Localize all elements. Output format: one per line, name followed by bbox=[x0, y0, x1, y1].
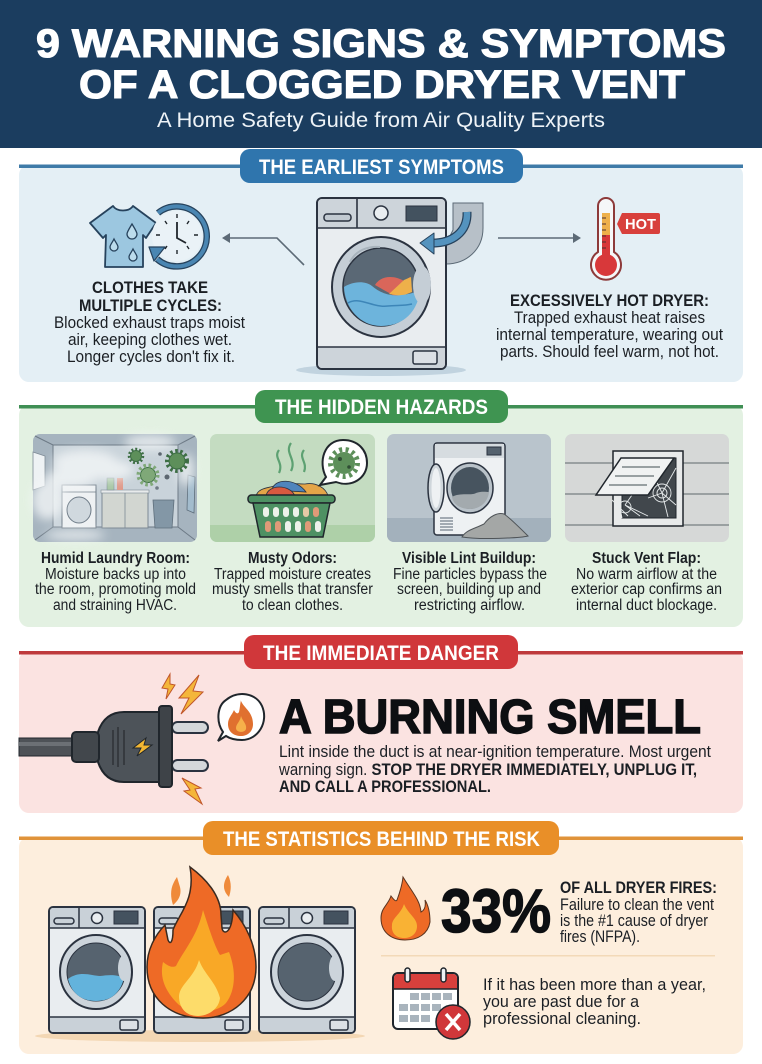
heading: the earliest symptoms bbox=[240, 149, 523, 183]
text: clothes take multiple cycles: Blocked exhaust traps moist bbox=[54, 314, 245, 332]
heading: the statistics behind the risk: THE STATISTICS BEHIND THE RISK bbox=[223, 828, 540, 851]
panel: the earliest symptoms bbox=[19, 149, 743, 382]
text: clothes take multiple cycles: Longer cycles don't fix it. bbox=[67, 348, 235, 366]
text: of all dryer fires: is the #1 cause of dryer bbox=[560, 912, 708, 930]
illustration: humid laundry room bbox=[32, 434, 197, 542]
text: musty odors: Trapped moisture creates bbox=[214, 566, 371, 583]
text: excessively hot dryer: EXCESSIVELY HOT DRYER: bbox=[510, 292, 709, 310]
text: of all dryer fires bbox=[560, 879, 717, 946]
arrow: to thermometer bbox=[498, 233, 581, 243]
text: musty odors bbox=[212, 550, 373, 614]
text: visible lint buildup bbox=[393, 550, 547, 614]
heading: the immediate danger: THE IMMEDIATE DANGER bbox=[263, 642, 499, 665]
illustration: stuck vent flap bbox=[565, 434, 729, 542]
arrow: to clothes bbox=[222, 233, 304, 265]
text: burning smell warning: Lint inside the duct is at near-ignition temperature. Most urgent bbox=[279, 743, 711, 761]
text: clothes take multiple cycles: air, keeping clothes wet. bbox=[68, 331, 232, 349]
text: excessively hot dryer: internal temperature, wearing out bbox=[496, 326, 723, 344]
illustration: dryer with blocked duct bbox=[296, 198, 483, 376]
statistic: 33 percent: 33% bbox=[441, 877, 551, 945]
text: past due reminder: If it has been more than a year, bbox=[483, 976, 706, 994]
title: OF A CLOGGED DRYER VENT bbox=[79, 63, 685, 107]
text: past due reminder: you are past due for a bbox=[483, 993, 640, 1011]
illustration: lint buildup bbox=[387, 434, 551, 542]
text: humid laundry room: and straining HVAC. bbox=[53, 597, 177, 614]
icon: flame speech bubble bbox=[218, 694, 264, 741]
text: of all dryer fires: Failure to clean the vent bbox=[560, 896, 714, 914]
text: humid laundry room: Moisture backs up into bbox=[45, 566, 186, 583]
text: stuck vent flap: internal duct blockage. bbox=[576, 597, 717, 614]
text: clothes take multiple cycles: MULTIPLE CYCLES: bbox=[79, 297, 222, 315]
text: musty odors: Musty Odors: bbox=[248, 550, 337, 567]
text: excessively hot dryer: Trapped exhaust heat raises bbox=[514, 309, 705, 327]
title bbox=[36, 22, 726, 107]
text: past due reminder bbox=[483, 976, 706, 1028]
text: burning smell warning bbox=[278, 743, 711, 796]
icon: hot thermometer bbox=[591, 198, 660, 280]
text: stuck vent flap: No warm airflow at the bbox=[576, 566, 717, 583]
text: burning smell warning: AND CALL A PROFESSIONAL. bbox=[279, 778, 491, 796]
text: of all dryer fires: fires (NFPA). bbox=[560, 928, 640, 946]
icon: wet t-shirt bbox=[90, 206, 156, 267]
text: visible lint buildup: Fine particles bypass the bbox=[393, 566, 547, 583]
panel: the immediate danger bbox=[19, 635, 743, 813]
panel: the hidden hazards bbox=[19, 390, 743, 627]
heading: a burning smell: A BURNING SMELL bbox=[279, 691, 701, 744]
text: of all dryer fires: OF ALL DRYER FIRES: bbox=[560, 879, 717, 897]
text: excessively hot dryer bbox=[496, 292, 723, 361]
heading: the hidden hazards: THE HIDDEN HAZARDS bbox=[275, 396, 488, 419]
illustration: musty laundry basket bbox=[210, 434, 375, 542]
icon: sparks bbox=[162, 674, 203, 804]
text: stuck vent flap bbox=[571, 550, 722, 614]
heading: the earliest symptoms: THE EARLIEST SYMPTOMS bbox=[259, 156, 504, 179]
text: excessively hot dryer: parts. Should feel warm, not hot. bbox=[500, 343, 719, 361]
illustration: three dryers with fire bbox=[35, 867, 365, 1042]
text: humid laundry room: the room, promoting mold bbox=[35, 581, 196, 598]
title: 9 WARNING SIGNS & SYMPTOMS bbox=[36, 22, 726, 66]
text: stuck vent flap: Stuck Vent Flap: bbox=[592, 550, 701, 567]
heading: the statistics behind the risk bbox=[203, 821, 559, 855]
icon: electrical plug with sparks bbox=[19, 674, 208, 804]
text: visible lint buildup: Visible Lint Buildup: bbox=[402, 550, 536, 567]
text: clothes take multiple cycles bbox=[54, 279, 245, 366]
hot tag: HOT bbox=[625, 216, 656, 233]
icon: calendar with x bbox=[393, 968, 470, 1039]
icon: mold spores bbox=[129, 449, 187, 490]
icon: mold speech bubble bbox=[320, 440, 367, 485]
text: visible lint buildup: restricting airflow. bbox=[414, 597, 525, 614]
text: humid laundry room bbox=[35, 550, 196, 614]
icon: clock with cycle arrow bbox=[149, 206, 207, 266]
text: musty odors: musty smells that transfer bbox=[212, 581, 373, 598]
text: clothes take multiple cycles: CLOTHES TAKE bbox=[92, 279, 208, 297]
heading: the hidden hazards bbox=[255, 390, 508, 423]
panel: the statistics behind the risk bbox=[19, 821, 743, 1054]
text: musty odors: to clean clothes. bbox=[242, 597, 343, 614]
icon: large flame bbox=[147, 867, 256, 1018]
text: stuck vent flap: exterior cap confirms an bbox=[571, 581, 722, 598]
heading: the immediate danger bbox=[244, 635, 518, 669]
icon: small flame bbox=[381, 877, 430, 940]
text: past due reminder: professional cleaning. bbox=[483, 1010, 641, 1028]
text: humid laundry room: Humid Laundry Room: bbox=[41, 550, 190, 567]
header banner bbox=[0, 0, 762, 148]
text: burning smell warning: warning sign. STOP THE DRYER IMMEDIATELY, UNPLUG IT, bbox=[278, 761, 697, 779]
subtitle: A Home Safety Guide from Air Quality Experts bbox=[157, 108, 605, 132]
text: visible lint buildup: screen, building up and bbox=[397, 581, 541, 598]
